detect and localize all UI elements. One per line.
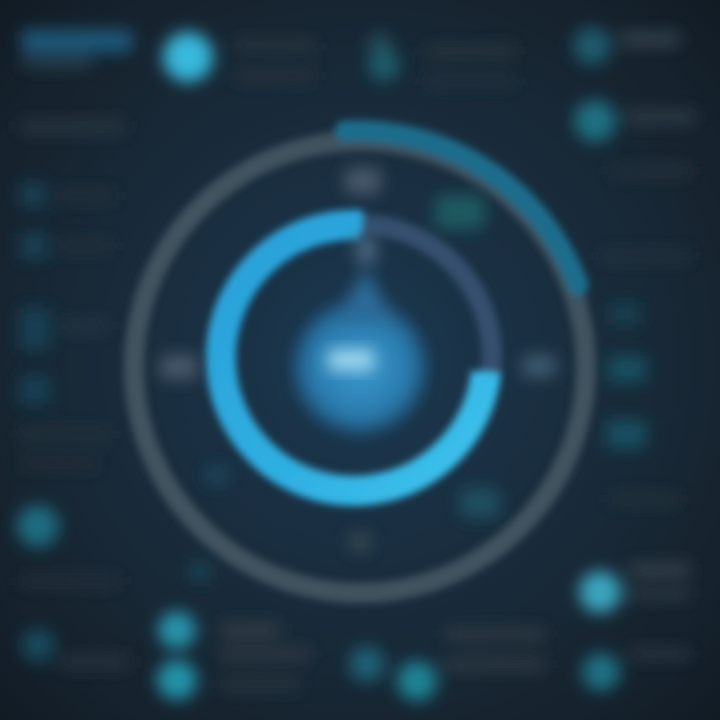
central drop [294,268,426,433]
top right items [573,27,695,262]
central label [328,350,374,370]
inner ring [221,224,492,492]
header block [22,30,515,87]
inner ring bright arc [221,225,486,491]
ring markers [160,168,556,552]
right column items [579,303,690,691]
outer ring highlight arc [345,131,578,285]
left column items [17,120,130,669]
bottom items [157,563,545,701]
outer ring [134,131,586,593]
